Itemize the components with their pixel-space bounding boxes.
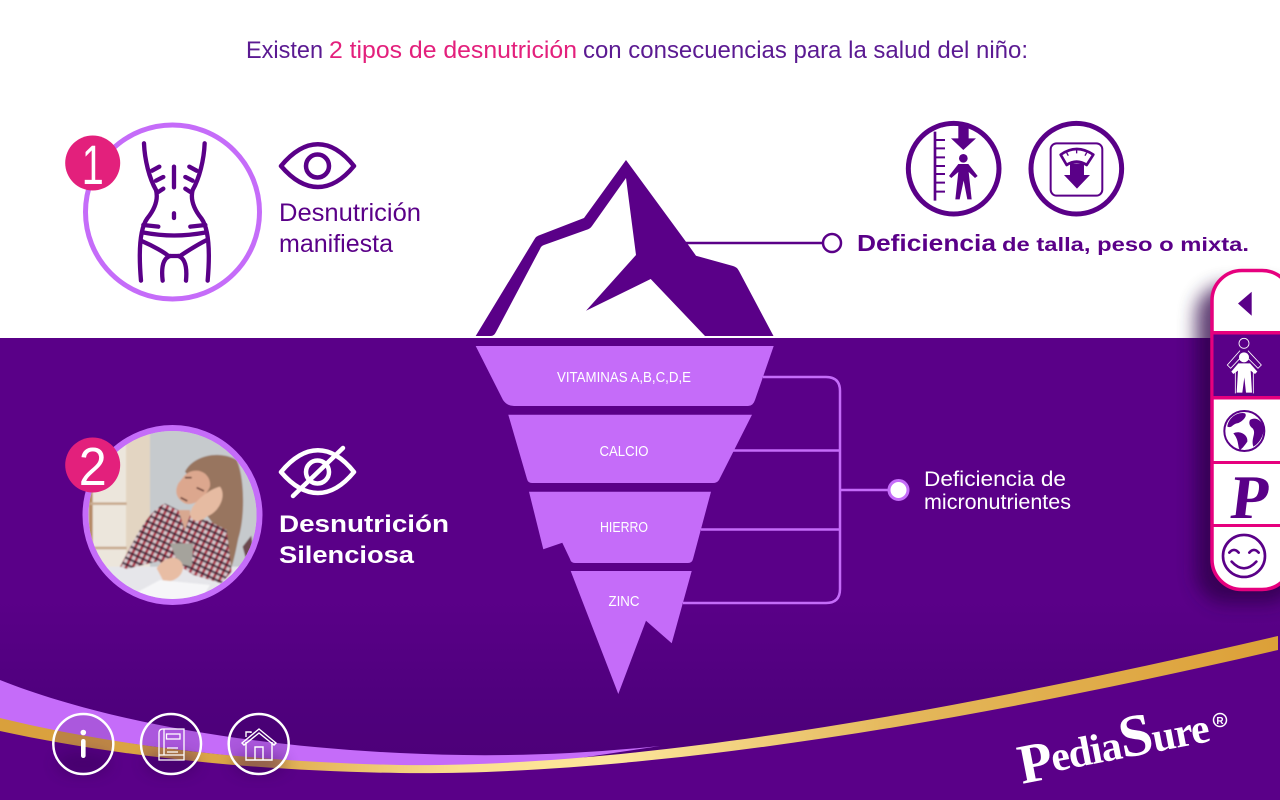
title: Existen xyxy=(246,37,323,64)
nav row: active body xyxy=(1214,333,1280,397)
label: desnutrición manifiesta: manifiesta xyxy=(279,230,393,258)
badge: number 2: 2 xyxy=(79,437,107,497)
layer: vitaminas xyxy=(476,346,774,406)
panel: desnutrición silenciosa xyxy=(65,425,449,615)
logo: PediaSure: Sure xyxy=(1113,700,1213,771)
layer: hierro xyxy=(529,492,711,563)
label: deficiencia de micronutrientes xyxy=(924,468,1071,514)
label: deficiencia de micronutrientes: micronutrientes xyxy=(924,491,1071,514)
icon: height xyxy=(908,123,999,214)
badge: number 1 xyxy=(65,133,120,196)
icon: weight scale xyxy=(1031,123,1122,214)
icon: torso xyxy=(140,143,209,281)
iceberg: visible tip xyxy=(476,160,774,336)
logo: PediaSure: R xyxy=(1216,716,1224,727)
label: desnutrición silenciosa xyxy=(279,511,449,569)
label: deficiency of height, weight or mixed: Deficiencia xyxy=(857,230,996,256)
layer: zinc xyxy=(571,571,692,694)
logo: PediaSure: P xyxy=(1013,729,1057,797)
layer: calcio xyxy=(508,415,752,483)
layer: vitaminas: VITAMINAS A,B,C,D,E xyxy=(557,370,691,386)
label: desnutrición silenciosa: Desnutrición xyxy=(279,511,449,538)
badge: number 1: 1 xyxy=(82,133,104,196)
label: deficiency of height, weight or mixed xyxy=(857,230,1249,256)
iceberg: submerged layers xyxy=(476,346,774,694)
panel: desnutrición manifiesta xyxy=(65,125,421,299)
nav separators xyxy=(1212,331,1280,527)
bottom button: info xyxy=(53,714,113,776)
label: desnutrición manifiesta: Desnutrición xyxy=(279,199,421,227)
side navigation xyxy=(1196,270,1280,603)
layer: zinc: ZINC xyxy=(608,594,640,610)
nav icon: globe xyxy=(1224,411,1264,451)
connector dot: micronutrients xyxy=(889,480,908,500)
title xyxy=(246,37,1028,64)
nav icon: smiley xyxy=(1223,535,1265,577)
label: desnutrición silenciosa: Silenciosa xyxy=(279,542,415,569)
title: 2 tipos de desnutrición xyxy=(329,37,577,64)
icon: open eye xyxy=(281,144,354,187)
swoosh band xyxy=(0,600,1280,773)
title: con consecuencias para la salud del niño: xyxy=(583,37,1028,64)
label: deficiencia de micronutrientes: Deficiencia de xyxy=(924,468,1066,491)
photo: pensive girl xyxy=(88,431,256,599)
ring: photo frame xyxy=(86,428,260,602)
bottom button: home xyxy=(229,714,289,776)
connector: tip to deficiency label xyxy=(686,234,841,252)
layer: calcio: CALCIO xyxy=(600,444,648,460)
background: purple lower area xyxy=(0,338,1280,800)
layer: hierro: HIERRO xyxy=(600,520,648,536)
logo: PediaSure: edia xyxy=(1047,723,1126,781)
bracket connecting micronutrient layers xyxy=(683,377,890,603)
label: deficiency of height, weight or mixed: de talla, peso o mixta. xyxy=(1002,234,1249,256)
badge: number 2 xyxy=(65,437,120,497)
logo: PediaSure xyxy=(1011,689,1226,797)
nav icon: P: P xyxy=(1227,464,1273,532)
ring: torso icon frame xyxy=(86,125,260,299)
nav shadow xyxy=(1196,285,1280,603)
nav panel xyxy=(1212,270,1280,590)
bottom button: book xyxy=(141,714,201,776)
icon: crossed-out eye xyxy=(281,448,354,496)
background: white upper area xyxy=(0,0,1280,338)
label: desnutrición manifiesta xyxy=(279,199,421,258)
nav arrow xyxy=(1238,292,1252,316)
